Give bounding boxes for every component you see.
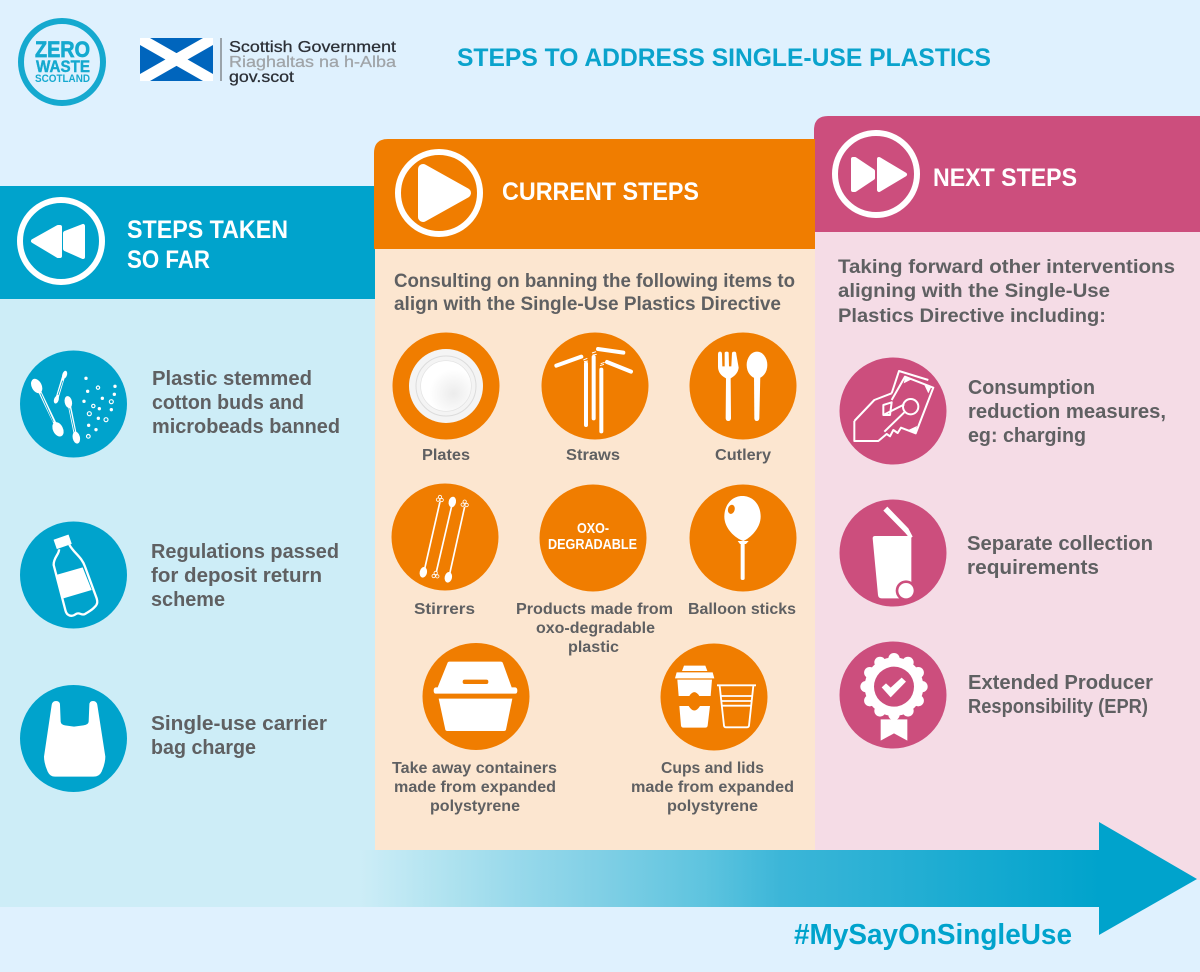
text: carrier bag charge: bag charge xyxy=(151,737,256,759)
icon: stirrers xyxy=(392,484,498,590)
logo: Zero Waste Scotland xyxy=(21,21,103,103)
icon: plate xyxy=(392,332,500,440)
icon: straws xyxy=(542,332,648,440)
text: extended producer responsibility: Extended Producer xyxy=(968,672,1153,694)
item: consumption reduction xyxy=(840,358,1166,464)
label: balloon sticks: Balloon sticks xyxy=(688,601,796,618)
arrow: timeline xyxy=(0,822,1197,935)
label: oxo-degradable products: oxo-degradable xyxy=(536,620,655,637)
panel: next steps xyxy=(814,116,1200,880)
item: cotton buds and microbeads xyxy=(20,350,340,458)
label: take away containers: made from expanded xyxy=(394,779,556,796)
item: carrier bag charge xyxy=(20,685,327,792)
intro: current steps: Consulting on banning the following items to xyxy=(394,271,795,292)
item: stirrers xyxy=(392,484,498,618)
text: carrier bag charge: Single-use carrier xyxy=(151,713,327,735)
text: consumption reduction: eg: charging xyxy=(968,425,1086,447)
header: steps taken so far xyxy=(0,186,375,299)
icon: hand with money xyxy=(840,358,946,464)
intro: next steps: aligning with the Single-Use xyxy=(838,281,1110,302)
item: cups and lids xyxy=(631,644,794,815)
label: straws: Straws xyxy=(566,447,620,464)
icon: oxo-degradable badge xyxy=(540,484,646,592)
item: balloon sticks xyxy=(688,484,796,618)
logo: Zero Waste Scotland: WASTE xyxy=(36,57,90,76)
icon: fast forward xyxy=(835,133,917,215)
header: current steps xyxy=(374,139,815,249)
logo: Scottish Government: Scottish Government xyxy=(229,39,397,56)
icon: oxo-degradable badge: OXO- xyxy=(577,520,609,537)
icon: rewind xyxy=(20,200,102,282)
text: deposit return scheme: scheme xyxy=(151,589,225,611)
text: extended producer responsibility: Responsibility (EPR) xyxy=(968,696,1148,718)
item: take away containers xyxy=(392,643,557,815)
item: extended producer responsibility xyxy=(840,642,1153,748)
icon: wheelie bin xyxy=(840,500,946,606)
icon: oxo-degradable badge: DEGRADABLE xyxy=(548,536,637,553)
icon: cups xyxy=(660,644,768,750)
intro: current steps: align with the Single-Use Plastics Directive xyxy=(394,294,781,315)
icon: balloon xyxy=(690,484,796,592)
text: cotton buds and microbeads: Plastic stemmed xyxy=(152,368,312,390)
icon: play xyxy=(398,152,480,234)
label: take away containers: Take away containers xyxy=(392,760,557,777)
hashtag: #MySayOnSingleUse xyxy=(794,919,1072,951)
panel: current steps xyxy=(374,139,815,850)
item: plates xyxy=(392,332,500,464)
item: deposit return scheme xyxy=(20,522,339,628)
text: separate collection: requirements xyxy=(967,557,1099,579)
text: separate collection: Separate collection xyxy=(967,533,1153,555)
logo: Scottish Government: gov.scot xyxy=(229,69,295,86)
label: cups and lids: Cups and lids xyxy=(661,760,764,777)
text: consumption reduction: Consumption xyxy=(968,377,1095,399)
item: straws xyxy=(542,332,648,464)
label: take away containers: polystyrene xyxy=(430,798,520,815)
icon: carrier bag xyxy=(20,685,127,792)
logo: Zero Waste Scotland: ZERO xyxy=(35,37,90,62)
label: stirrers: Stirrers xyxy=(414,601,475,618)
logo: Scottish Government: Riaghaltas na h-Alba xyxy=(229,54,396,71)
item: oxo-degradable products xyxy=(516,484,673,656)
icon: rosette xyxy=(840,642,946,748)
title: STEPS TO ADDRESS SINGLE-USE PLASTICS xyxy=(457,44,991,72)
item: separate collection xyxy=(840,500,1153,606)
header: next steps xyxy=(814,116,1200,232)
text: consumption reduction: reduction measures, xyxy=(968,401,1166,423)
label: oxo-degradable products: plastic xyxy=(568,639,619,656)
intro: next steps: Taking forward other interventions xyxy=(838,257,1175,278)
icon: cotton buds and microbeads xyxy=(20,350,127,458)
heading: steps taken so far: SO FAR xyxy=(127,246,210,274)
text: deposit return scheme: Regulations passed xyxy=(151,541,339,563)
text: cotton buds and microbeads: microbeads banned xyxy=(152,416,340,438)
label: plates: Plates xyxy=(422,447,470,464)
heading: steps taken so far: STEPS TAKEN xyxy=(127,216,288,244)
icon: fork and spoon xyxy=(690,332,796,440)
label: oxo-degradable products: Products made from xyxy=(516,601,673,618)
logo: Zero Waste Scotland: SCOTLAND xyxy=(35,73,90,85)
heading: current steps: CURRENT STEPS xyxy=(502,178,699,206)
heading: next steps: NEXT STEPS xyxy=(933,164,1077,192)
label: cups and lids: polystyrene xyxy=(667,798,758,815)
intro: next steps: Plastics Directive including: xyxy=(838,306,1106,327)
text: cotton buds and microbeads: cotton buds and xyxy=(152,392,304,414)
label: cups and lids: made from expanded xyxy=(631,779,794,796)
icon: bottle xyxy=(20,522,127,628)
icon: takeaway container xyxy=(422,643,530,750)
logo: Scottish Government xyxy=(140,38,397,86)
text: deposit return scheme: for deposit return xyxy=(151,565,322,587)
label: cutlery: Cutlery xyxy=(715,447,771,464)
panel: steps taken so far xyxy=(0,186,375,850)
item: cutlery xyxy=(690,332,796,464)
